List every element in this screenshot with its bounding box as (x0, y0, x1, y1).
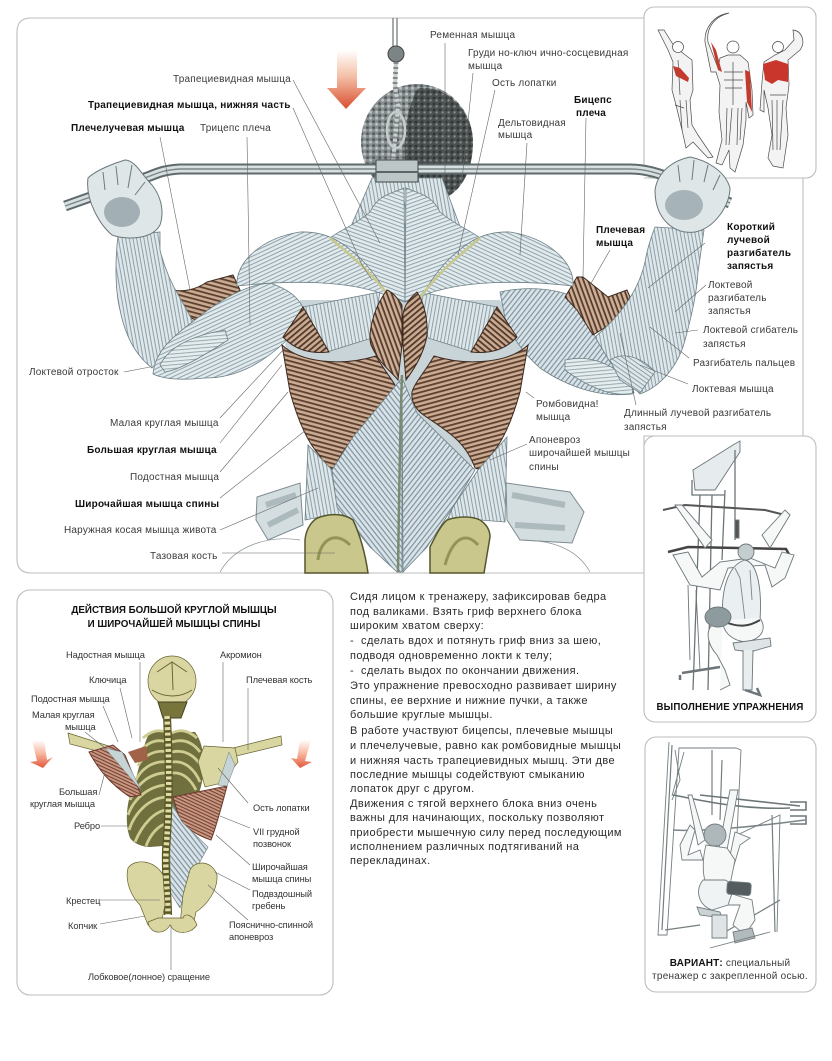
label: latissimus small: Широчайшая (252, 862, 308, 872)
label: brachioradialis (71, 123, 190, 290)
label: brachioradialis: Плечелучевая мышца (71, 123, 185, 134)
label: trapezius: Трапециевидная мышца (173, 74, 291, 85)
caption (652, 958, 808, 982)
text block: exercise description: последние мышцы содействуют смыканию (350, 769, 585, 781)
label: extensor carpi ulnaris: запястья (708, 306, 751, 317)
right arm (500, 157, 730, 395)
torso backing (285, 300, 525, 470)
torso half with mirror (237, 188, 405, 469)
text block: exercise description: лопаток друг с другом. (350, 783, 475, 795)
label: sternocleidomastoid: мышца (468, 61, 503, 72)
label: teres minor small: Малая круглая (32, 710, 95, 720)
text block: exercise description (350, 591, 622, 867)
thoracolumbar aponeurosis (332, 375, 475, 572)
label: deltoid: Дельтовидная (498, 118, 566, 129)
label: flexor carpi ulnaris: Локтевой сгибатель (703, 324, 798, 336)
latissimus (282, 345, 398, 469)
label: teres major (87, 365, 282, 456)
label: extensor carpi radialis brevis: запястья (727, 261, 773, 272)
heading: ДЕЙСТВИЯ БОЛЬШОЙ КРУГЛОЙ МЫШЦЫ (71, 604, 277, 616)
label: pubic symphysis (88, 925, 210, 982)
icon: figure side view (658, 30, 713, 158)
teres and infraspinatus right (420, 292, 517, 352)
text block: exercise description: В работе участвуют бицепсы, плечевые мышцы (350, 725, 613, 737)
caption: ВАРИАНТ: специальный (670, 958, 790, 969)
upper arm right (500, 289, 634, 395)
text block: exercise description: большие круглые мышцы. (350, 709, 493, 721)
label: clavicle: Ключица (89, 675, 127, 685)
latissimus right (173, 786, 227, 840)
text block: exercise description: Сидя лицом к тренажеру, зафиксировав бедра (350, 591, 607, 603)
label: acromion (220, 650, 262, 742)
label: rhomboid: мышца (536, 412, 571, 423)
label: infraspinatus small: Подостная мышца (31, 694, 111, 704)
label: extensor carpi radialis brevis: Короткий (727, 222, 775, 233)
text block: exercise description: Это упражнение превосходно развивает ширину (350, 680, 617, 692)
oblique muscles (305, 437, 507, 525)
hand left (88, 160, 162, 238)
skull (148, 656, 196, 706)
skeleton (68, 656, 282, 932)
label: biceps: плеча (576, 108, 606, 119)
deltoid (237, 232, 388, 296)
label: seventh thoracic vertebra: VII грудной (253, 827, 300, 837)
label: rib (74, 821, 128, 831)
label: infraspinatus: Подостная мышца (130, 472, 219, 483)
label: teres major small: Большая (59, 787, 97, 797)
caption: ВЫПОЛНЕНИЕ УПРАЖНЕНИЯ (656, 702, 804, 713)
label: triceps: Трицепс плеча (200, 123, 271, 134)
label: teres minor small (32, 710, 105, 748)
label: coccyx: Копчик (68, 921, 98, 931)
label: teres major small: круглая мышца (30, 799, 96, 809)
label: anconeus: Локтевая мышца (692, 384, 774, 395)
label: teres minor: Малая круглая мышца (110, 418, 219, 429)
panel: main anatomy frame (17, 18, 803, 573)
bar (65, 160, 730, 206)
label: brachialis (590, 225, 645, 285)
cable and pulley (387, 18, 405, 160)
forearm left (116, 232, 195, 368)
label: extensor carpi radialis longus: Длинный лучевой разгибатель (624, 407, 771, 419)
hand right (655, 157, 730, 232)
label: teres minor small: мышца (65, 722, 96, 732)
text block: exercise description: и нижняя часть трапециевидных мышц. Эти две (350, 755, 615, 767)
label: lumbar aponeurosis: апоневроз (229, 932, 273, 942)
label: rhomboid: Ромбовидна! (536, 398, 599, 410)
label: humerus: Плечевая кость (246, 675, 313, 685)
arrow: direction of pull (327, 50, 366, 109)
label: deltoid: мышца (498, 130, 533, 141)
label: seventh thoracic vertebra (220, 816, 300, 849)
illustration: fixed-axis machine (658, 742, 806, 948)
label: latissimus aponeurosis: Апоневроз (529, 435, 581, 446)
label: sternocleidomastoid: Груди но-ключ ично-сосцевидная (468, 48, 628, 59)
label: rib: Ребро (74, 821, 100, 831)
spine (166, 716, 169, 915)
label: splenius: Ременная мышца (430, 30, 515, 41)
label: brachialis: мышца (596, 238, 633, 249)
text block: exercise description: широким хватом сверху: (350, 620, 484, 632)
pelvis (127, 862, 165, 930)
label: latissimus small: мышца спины (252, 874, 312, 884)
icon: figure front view (705, 13, 753, 172)
text block: exercise description: перекладинах. (350, 855, 431, 867)
label: teres major: Большая круглая мышца (87, 445, 217, 456)
label: lower trapezius (88, 100, 372, 280)
text block: exercise description: - сделать выдох по окончании движения. (350, 665, 579, 677)
label: infraspinatus small (31, 694, 118, 742)
label: teres major small (30, 772, 105, 809)
panel: variant machine (645, 737, 816, 992)
neck (345, 178, 465, 270)
label: flexor carpi ulnaris: запястья (703, 339, 746, 350)
label: latissimus aponeurosis: спины (529, 462, 559, 473)
heading: И ШИРОЧАЙШЕЙ МЫШЦЫ СПИНЫ (88, 618, 260, 630)
hair (361, 84, 473, 200)
panel: action of teres major and latissimus (17, 590, 333, 995)
text block: exercise description: спины, ее верхние и нижние пучки, а также (350, 695, 588, 707)
text block: exercise description: приобрести мышечную силу перед последующим (350, 827, 622, 839)
label: iliac crest: Подвздошный (252, 889, 312, 899)
label: trapezius (173, 74, 380, 243)
icon: figure back view (760, 30, 803, 168)
label: lower trapezius: Трапециевидная мышца, нижняя часть (88, 100, 291, 111)
trapezius (330, 188, 405, 302)
label: extensor carpi radialis longus: запястья (624, 422, 667, 433)
label: extensor digitorum: Разгибатель пальцев (693, 357, 795, 369)
rhomboid right (403, 292, 427, 380)
label: lumbar aponeurosis (208, 885, 313, 942)
label: scapular spine (458, 78, 557, 255)
scapula right (198, 746, 238, 787)
text block: exercise description: под валиками. Взять гриф верхнего блока (350, 606, 582, 618)
label: extensor carpi radialis brevis: лучевой (727, 235, 770, 246)
triceps left (153, 283, 303, 379)
pelvic bones (305, 515, 490, 573)
teres and infraspinatus left (283, 292, 380, 352)
label: triceps (200, 123, 271, 325)
label: iliac crest (215, 872, 312, 911)
label: sacrum (66, 896, 160, 906)
label: teres minor (110, 348, 285, 429)
label: external oblique: Наружная косая мышца живота (64, 525, 217, 536)
label: anconeus (640, 365, 774, 395)
label: latissimus aponeurosis (490, 435, 630, 473)
text block: exercise description: Движения с тягой верхнего блока вниз очень (350, 798, 597, 810)
icon: right red arrow (291, 740, 312, 768)
brachialis right (565, 277, 630, 335)
label: flexor carpi ulnaris (675, 324, 798, 350)
panel: performing the exercise (644, 436, 816, 722)
label: external oblique (64, 488, 318, 536)
illustration: lat pulldown back view (65, 18, 730, 573)
label: supraspinatus (66, 650, 146, 742)
label: clavicle (89, 675, 132, 738)
seat rollers and thighs (220, 483, 590, 572)
label: sacrum: Крестец (66, 896, 101, 906)
ribcage dark backing (127, 732, 204, 847)
label: scapular spine: Ость лопатки (492, 78, 557, 89)
label: latissimus dorsi: Широчайшая мышца спины (75, 499, 219, 510)
text block: exercise description: исполнением различных подтягиваний на (350, 841, 580, 853)
label: brachialis: Плечевая (596, 225, 645, 236)
arms (68, 733, 118, 756)
label: pelvic bone: Тазовая кость (150, 551, 218, 562)
label: pubic symphysis: Лобковое(лонное) сращение (88, 972, 210, 982)
label: olecranon: Локтевой отросток (29, 367, 119, 378)
left arm (88, 160, 303, 379)
panel: muscle activation figures (644, 7, 816, 178)
label: seventh thoracic vertebra: позвонок (253, 839, 292, 849)
label: deltoid (498, 118, 566, 255)
label: humerus (246, 675, 313, 750)
label: extensor carpi radialis brevis (648, 222, 791, 288)
label: supraspinatus: Надостная мышца (66, 650, 146, 660)
label: latissimus small (216, 835, 312, 884)
label: rhomboid (526, 392, 599, 423)
text block: exercise description: и плечелучевые, равно как ромбовидные мышцы (350, 740, 621, 752)
text block: exercise description: важны для начинающих, поскольку позволяют (350, 812, 604, 824)
label: extensor carpi ulnaris: разгибатель (708, 292, 767, 304)
label: biceps: Бицепс (574, 95, 612, 106)
label: scapular spine small: Ость лопатки (253, 803, 310, 813)
label: extensor carpi ulnaris: Локтевой (708, 280, 753, 291)
illustration: lat machine (663, 441, 794, 695)
forearm right (595, 227, 704, 394)
label: lumbar aponeurosis: Пояснично-спинной (229, 920, 313, 930)
lumbar fascia (170, 800, 208, 908)
label: sternocleidomastoid (462, 48, 628, 180)
label: scapular spine small (218, 768, 310, 813)
label: infraspinatus (130, 392, 288, 483)
rhomboid left (370, 290, 402, 380)
label: biceps (574, 95, 612, 277)
brachialis left (170, 275, 240, 322)
label: latissimus dorsi (75, 430, 306, 510)
label: coccyx (68, 916, 145, 931)
label: latissimus aponeurosis: широчайшей мышцы (529, 448, 630, 459)
label: extensor digitorum (650, 327, 795, 369)
label: iliac crest: гребень (252, 901, 286, 911)
caption: тренажер с закрепленной осью. (652, 971, 808, 982)
text block: exercise description: подводя одновременно локти к телу; (350, 650, 552, 662)
ribs (128, 731, 201, 846)
label: extensor carpi radialis brevis: разгибатель (727, 247, 791, 259)
teres muscle left (89, 745, 141, 797)
label: extensor carpi ulnaris (675, 280, 767, 317)
text block: exercise description: - сделать вдох и потянуть гриф вниз за шею, (350, 635, 601, 647)
torso right half (405, 188, 573, 469)
label: acromion: Акромион (220, 650, 262, 660)
icon: left red arrow (30, 740, 53, 768)
label: extensor carpi radialis longus (620, 333, 771, 433)
